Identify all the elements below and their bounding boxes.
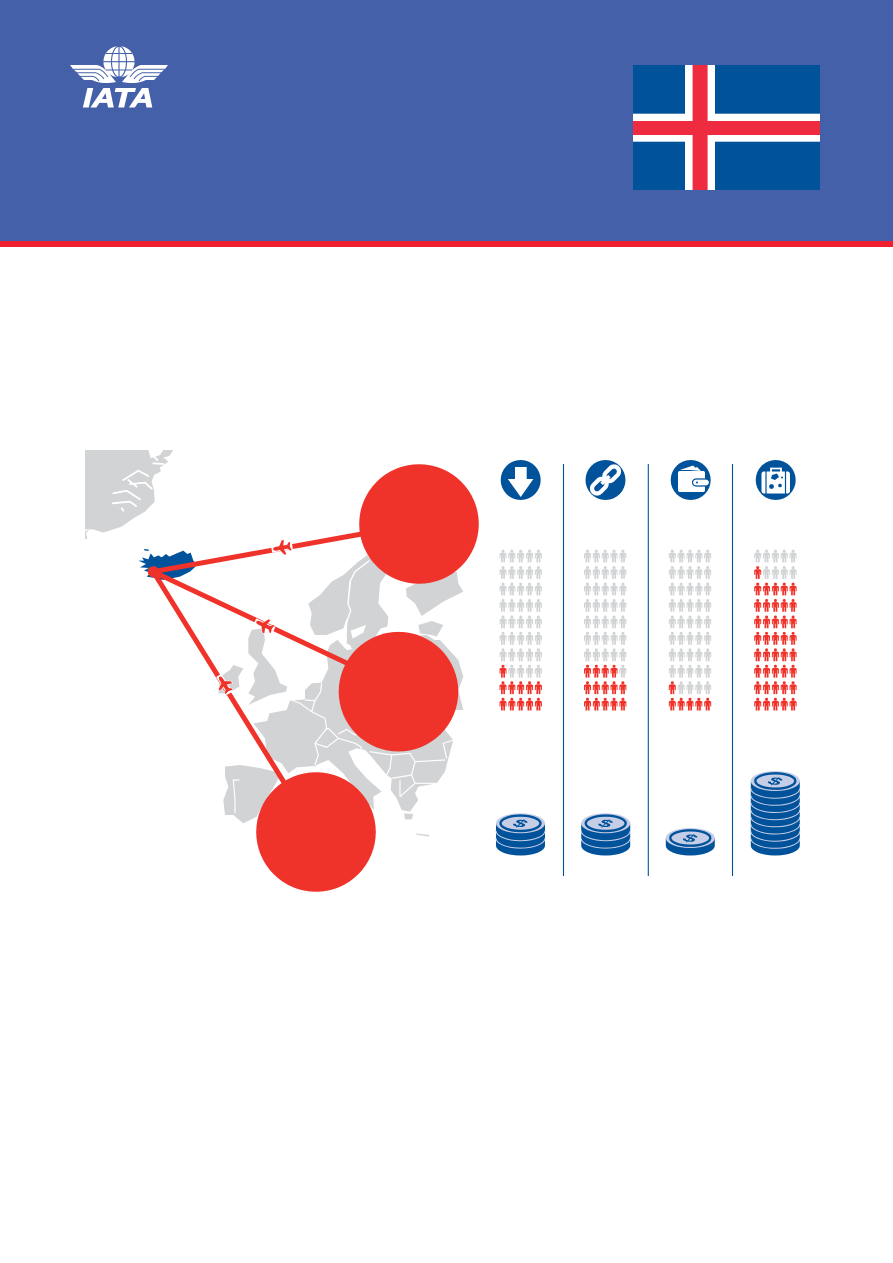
great britain and ireland xyxy=(218,628,287,705)
column divider 2 xyxy=(647,464,649,876)
route to central europe xyxy=(153,572,355,667)
coin stack column 2 xyxy=(581,813,630,856)
destination circle south xyxy=(256,772,376,892)
route to northern europe xyxy=(153,532,370,572)
map of europe xyxy=(85,450,463,837)
IATA logo xyxy=(70,46,168,113)
logo globe xyxy=(103,46,135,77)
route to southern europe xyxy=(153,572,290,792)
header red stripe xyxy=(0,241,893,247)
icelandic flag xyxy=(633,65,820,190)
iceland highlighted xyxy=(138,549,197,580)
people grid column 4 xyxy=(754,550,797,710)
destination circle north xyxy=(359,464,479,584)
continental europe xyxy=(223,640,463,837)
coin stack column 1 xyxy=(496,813,545,856)
scandinavia and baltics xyxy=(308,553,388,680)
logo wordmark: IATA xyxy=(83,83,154,113)
icon: chain link xyxy=(586,460,626,500)
logo wings xyxy=(70,65,168,83)
icon: wallet xyxy=(671,460,711,500)
people grid column 1 xyxy=(500,550,542,710)
finland and baltic states xyxy=(406,572,463,710)
coin stack column 4 xyxy=(751,771,800,856)
people grid column 2 xyxy=(584,550,626,710)
route lines xyxy=(148,532,370,792)
icon: down arrow xyxy=(501,460,541,500)
icon: suitcase xyxy=(756,460,796,500)
header band xyxy=(0,0,893,241)
destination circle central xyxy=(339,632,458,752)
people grid column 3 xyxy=(669,550,711,710)
column divider 1 xyxy=(562,464,564,876)
coin stack column 3 xyxy=(666,828,715,856)
greenland xyxy=(85,450,173,539)
origin point xyxy=(148,566,159,577)
column divider 3 xyxy=(732,464,734,876)
